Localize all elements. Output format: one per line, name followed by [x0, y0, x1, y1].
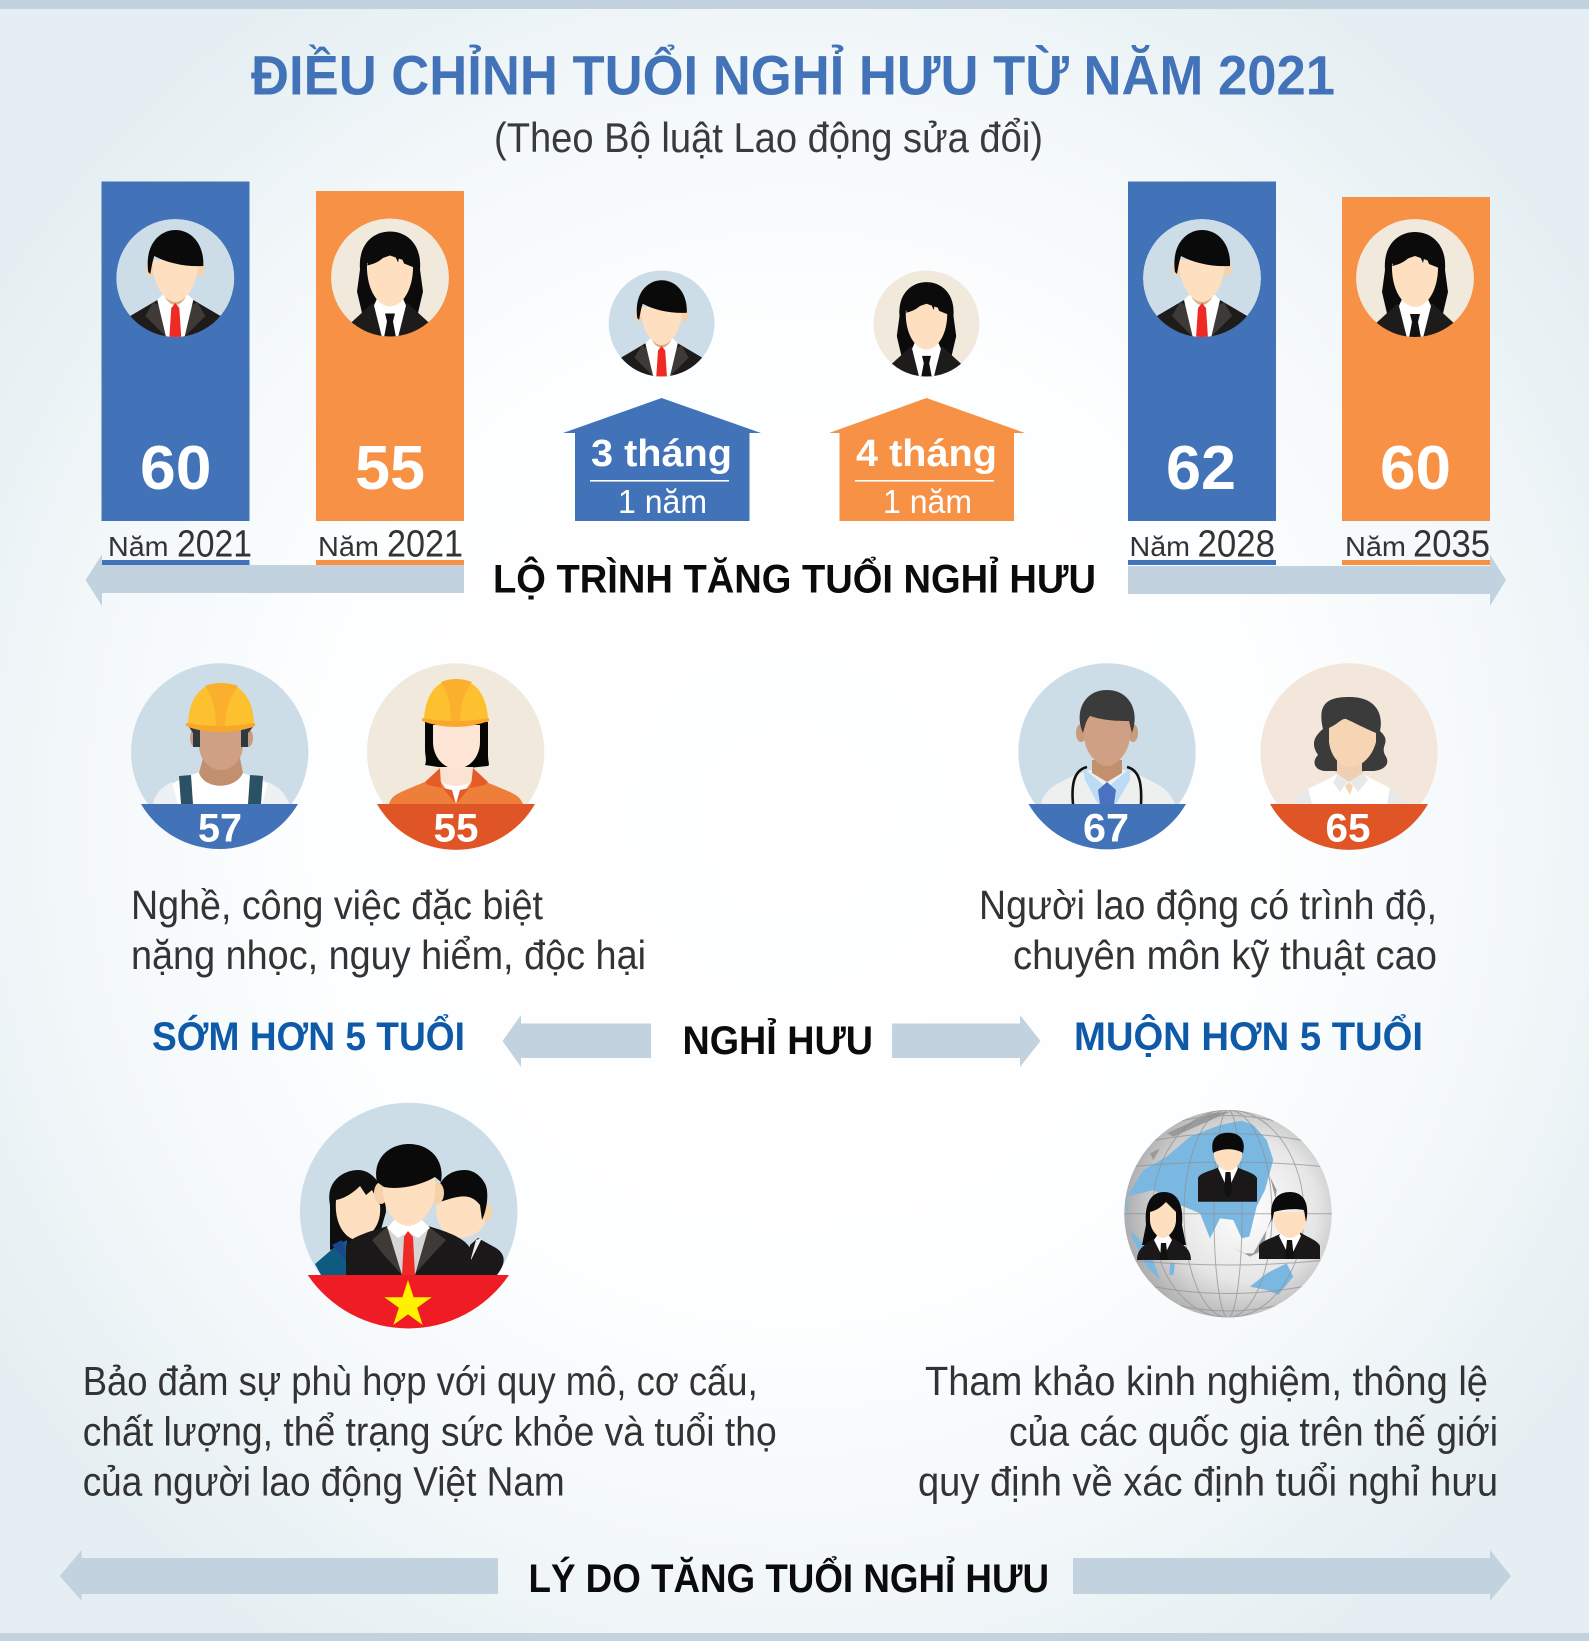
panel: female increase per year	[829, 270, 1025, 521]
text block: international reason: của các quốc gia trên thế giới	[1009, 1408, 1498, 1454]
icon: female worker 55	[367, 663, 544, 850]
year label	[1345, 524, 1490, 566]
period text: 1 năm	[618, 483, 707, 520]
increase text: 3 tháng	[591, 433, 732, 475]
icon: man portrait	[116, 219, 234, 340]
arrow: left reasons	[60, 1550, 498, 1601]
year label: 2035	[1413, 524, 1490, 566]
title: ĐIỀU CHỈNH TUỔI NGHỈ HƯU TỪ NĂM 2021	[251, 44, 1335, 106]
arrow: right retirement	[892, 1015, 1040, 1067]
value: 60	[140, 434, 212, 503]
text block: late retirement workers	[979, 882, 1437, 978]
year label	[1130, 524, 1275, 566]
text block: Vietnam reason	[83, 1358, 777, 1505]
icon: woman portrait	[331, 218, 449, 340]
heading: roadmap: LỘ TRÌNH TĂNG TUỔI NGHỈ HƯU	[493, 554, 1096, 602]
subtitle: (Theo Bộ luật Lao động sửa đổi)	[494, 114, 1043, 161]
text block: international reason	[918, 1358, 1498, 1505]
age badge	[377, 804, 535, 850]
year label: 2021	[177, 524, 252, 566]
age badge	[1028, 804, 1186, 849]
flag segment	[308, 1275, 509, 1328]
year label: Năm	[1345, 531, 1406, 562]
left woman	[1137, 1192, 1191, 1260]
label: five years earlier: SỚM HƠN 5 TUỔI	[152, 1012, 465, 1059]
text block: late retirement workers: chuyên môn kỹ thuật cao	[1013, 932, 1437, 978]
panel: male 2028 bar	[1128, 182, 1276, 566]
world map	[1125, 1112, 1293, 1295]
icon: small woman portrait	[874, 270, 980, 379]
icon: male specialist 67	[1018, 663, 1196, 850]
icon: female specialist 65	[1260, 663, 1438, 850]
panel: female 2021 bar	[316, 191, 464, 566]
arrow: left retirement	[502, 1015, 651, 1067]
age number: 67	[1083, 806, 1129, 850]
text block: international reason: Tham khảo kinh nghiệm, thông lệ	[925, 1358, 1488, 1404]
age number: 65	[1326, 806, 1370, 850]
text block: early retirement occupations: nặng nhọc, nguy hiểm, độc hại	[131, 932, 646, 978]
value: 62	[1166, 434, 1236, 503]
panel: female 2035 bar	[1342, 197, 1490, 566]
right man	[435, 1170, 504, 1275]
label: five years later: MUỘN HƠN 5 TUỔI	[1074, 1012, 1423, 1059]
house shape	[563, 398, 761, 521]
year label	[108, 524, 252, 566]
arrow: right reasons	[1073, 1550, 1511, 1601]
icon: man portrait	[1143, 219, 1261, 340]
arrow: left roadmap	[86, 554, 464, 606]
left woman	[315, 1170, 386, 1275]
icon: small man portrait	[609, 270, 715, 379]
period text: 1 năm	[883, 483, 972, 520]
increase text: 4 tháng	[856, 433, 997, 475]
text block: Vietnam reason: của người lao động Việt Nam	[83, 1459, 565, 1505]
center man	[346, 1144, 471, 1275]
value: 55	[355, 434, 425, 503]
graticule	[1124, 1110, 1332, 1318]
icon: male worker 57	[131, 663, 308, 850]
age badge	[1270, 804, 1428, 850]
icon: globe with people	[1124, 1110, 1332, 1318]
year label: Năm	[318, 531, 379, 562]
top man	[1198, 1133, 1257, 1202]
text block: Vietnam reason: chất lượng, thể trạng sức khỏe và tuổi thọ	[83, 1408, 777, 1454]
age number: 57	[198, 806, 242, 850]
text block: late retirement workers: Người lao động có trình độ,	[979, 882, 1437, 928]
panel: male 2021 bar	[102, 182, 252, 566]
text block: international reason: quy định về xác định tuổi nghỉ hưu	[918, 1459, 1498, 1505]
year label	[318, 524, 463, 566]
right man	[1259, 1192, 1320, 1259]
year label: Năm	[1130, 531, 1190, 562]
label: retirement: NGHỈ HƯU	[682, 1017, 873, 1063]
value: 60	[1380, 434, 1451, 503]
icon: Vietnamese workforce	[300, 1103, 517, 1328]
text block: early retirement occupations: Nghề, công việc đặc biệt	[131, 882, 544, 928]
house shape	[829, 398, 1025, 521]
year label: 2021	[387, 524, 463, 566]
flag star	[384, 1280, 432, 1325]
heading: reasons: LÝ DO TĂNG TUỔI NGHỈ HƯU	[528, 1554, 1049, 1601]
icon: woman portrait	[1356, 219, 1474, 340]
panel: male increase per year	[563, 270, 761, 521]
year label: Năm	[108, 531, 168, 562]
text block: Vietnam reason: Bảo đảm sự phù hợp với quy mô, cơ cấu,	[83, 1358, 758, 1404]
age number: 55	[434, 806, 478, 850]
age badge	[141, 804, 298, 849]
year label: 2028	[1198, 524, 1275, 566]
arrow: right roadmap	[1128, 554, 1506, 606]
text block: early retirement occupations	[131, 882, 646, 978]
